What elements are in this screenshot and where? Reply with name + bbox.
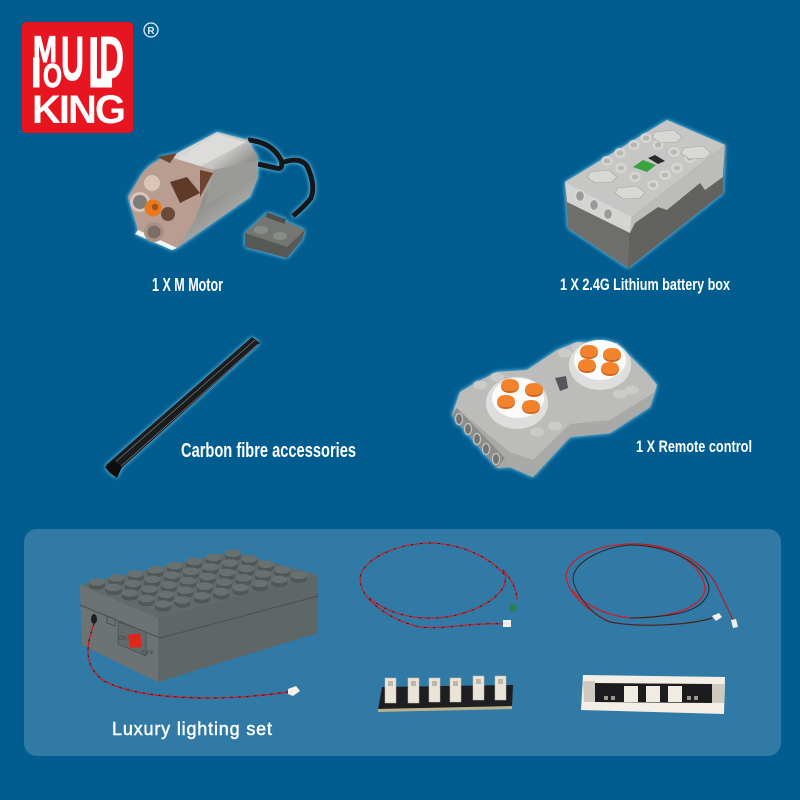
wire with LED: [360, 543, 517, 628]
battery brick: [80, 550, 318, 698]
LED strip right: [581, 675, 725, 714]
label: carbon fibre: Carbon fibre accessories: [181, 440, 356, 462]
label: lighting set: Luxury lighting set: [112, 719, 272, 739]
motor plug: [245, 213, 305, 258]
carbon fibre rod: [105, 337, 260, 478]
brick switch recess: [118, 622, 146, 656]
brick wire: [88, 624, 288, 698]
LED green board: [509, 604, 517, 612]
brick sides: [80, 585, 158, 682]
remote switch: [555, 376, 568, 391]
brick switch: [128, 633, 142, 648]
brick top: [80, 552, 318, 618]
motor body: [170, 132, 258, 248]
brick socket: [91, 614, 97, 624]
battery studs: [602, 134, 694, 189]
brick studs: [89, 550, 307, 612]
battery box icon: [565, 120, 725, 268]
remote pin row: [452, 408, 505, 468]
remote left dial: [486, 377, 548, 429]
battery top face: [565, 120, 725, 217]
label: battery box: 1 X 2.4G Lithium battery box: [560, 275, 730, 294]
battery light side bands: [565, 182, 632, 233]
logo: Mould King: [22, 22, 133, 133]
LED strip left: [378, 676, 513, 712]
logo: Mould King: D: [99, 25, 124, 91]
remote right dial: [569, 340, 631, 390]
wire pair: [566, 544, 738, 628]
remote control icon: [452, 340, 657, 477]
battery side holes: [576, 190, 612, 220]
logo: Mould King: L: [88, 24, 113, 103]
registered mark: R: [147, 26, 155, 37]
battery dark base: [565, 145, 725, 268]
motor cable: [248, 140, 313, 216]
M motor icon: [128, 132, 313, 258]
battery brick: OFF: [142, 651, 154, 657]
logo: Mould King: M: [33, 29, 57, 70]
brick small window: [107, 616, 115, 626]
brick wire plug: [288, 686, 300, 696]
panel: lighting set: [24, 529, 781, 756]
battery port: [648, 155, 665, 164]
label: M motor: 1 X M Motor: [152, 275, 223, 295]
logo: Mould King: U: [61, 25, 84, 94]
brick ON and OFF marks: ON: [118, 636, 127, 642]
remote lower side: [452, 392, 655, 477]
motor clear end: [128, 157, 213, 248]
label: remote control: 1 X Remote control: [636, 438, 752, 456]
logo: Mould King: O: [43, 57, 62, 94]
battery technic clips: [587, 130, 711, 199]
connector plugs: [712, 613, 722, 621]
motor orange hub: [144, 200, 162, 216]
wire plug: [503, 620, 511, 627]
remote top studs: [473, 342, 639, 436]
battery green button: [633, 160, 656, 172]
logo: Mould King: KING: [32, 88, 126, 132]
registered mark: [144, 23, 158, 37]
remote body: [452, 342, 657, 477]
